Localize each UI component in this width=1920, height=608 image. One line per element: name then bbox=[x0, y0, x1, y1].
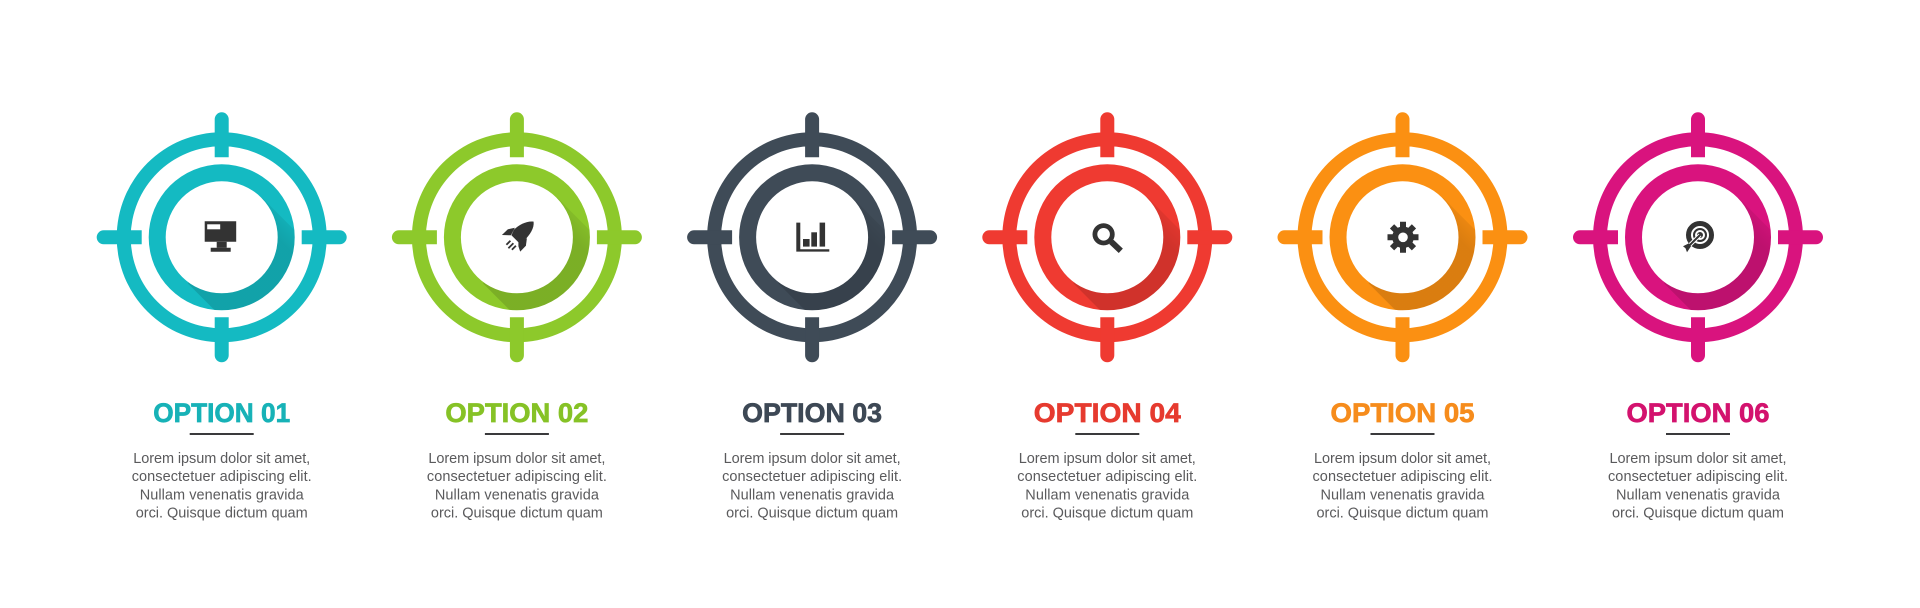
description 01: Lorem ipsum dolor sit amet, bbox=[133, 451, 310, 467]
option 01 bbox=[97, 112, 352, 522]
description 05: orci. Quisque dictum quam bbox=[1316, 506, 1488, 522]
description 04 bbox=[1017, 451, 1197, 522]
target graphic 05 bbox=[1278, 112, 1532, 367]
description 05: consectetuer adipiscing elit. bbox=[1312, 469, 1492, 485]
heading 03: OPTION 03 bbox=[742, 398, 882, 428]
target graphic 01 bbox=[97, 112, 352, 367]
option 06 bbox=[1573, 112, 1828, 522]
description 05: Nullam venenatis gravida bbox=[1320, 488, 1485, 504]
heading 02: OPTION 02 bbox=[445, 398, 588, 428]
heading 05: OPTION 05 bbox=[1330, 398, 1474, 428]
description 02: orci. Quisque dictum quam bbox=[431, 506, 603, 522]
description 04: Nullam venenatis gravida bbox=[1025, 488, 1190, 504]
option 04 bbox=[982, 112, 1237, 522]
description 01 bbox=[132, 451, 312, 522]
icon: gear bbox=[1381, 215, 1425, 259]
description 06 bbox=[1608, 451, 1788, 522]
description 01: consectetuer adipiscing elit. bbox=[132, 469, 312, 485]
description 03: consectetuer adipiscing elit. bbox=[722, 469, 902, 485]
icon: bar chart bbox=[796, 223, 829, 252]
option 05 bbox=[1278, 112, 1532, 522]
option 02 bbox=[392, 112, 647, 522]
icon: rocket bbox=[502, 221, 534, 252]
target graphic 04 bbox=[982, 112, 1237, 367]
description 06: orci. Quisque dictum quam bbox=[1612, 506, 1784, 522]
target graphic 02 bbox=[392, 112, 647, 367]
description 03: Lorem ipsum dolor sit amet, bbox=[724, 451, 901, 467]
description 05: Lorem ipsum dolor sit amet, bbox=[1314, 451, 1491, 467]
description 06: consectetuer adipiscing elit. bbox=[1608, 469, 1788, 485]
target graphic 06 bbox=[1573, 112, 1828, 367]
description 02 bbox=[427, 451, 607, 522]
description 02: Nullam venenatis gravida bbox=[435, 488, 600, 504]
description 01: Nullam venenatis gravida bbox=[140, 488, 305, 504]
description 03: Nullam venenatis gravida bbox=[730, 488, 895, 504]
description 03 bbox=[722, 451, 902, 522]
target graphic 03 bbox=[687, 112, 942, 367]
icon: magnifier bbox=[1095, 226, 1121, 251]
option 03 bbox=[687, 112, 942, 522]
description 02: consectetuer adipiscing elit. bbox=[427, 469, 607, 485]
description 04: orci. Quisque dictum quam bbox=[1021, 506, 1193, 522]
description 02: Lorem ipsum dolor sit amet, bbox=[428, 451, 605, 467]
description 06: Nullam venenatis gravida bbox=[1616, 488, 1781, 504]
description 06: Lorem ipsum dolor sit amet, bbox=[1610, 451, 1786, 467]
heading 06: OPTION 06 bbox=[1626, 398, 1770, 428]
heading 01: OPTION 01 bbox=[153, 398, 290, 428]
description 03: orci. Quisque dictum quam bbox=[726, 506, 898, 522]
description 04: Lorem ipsum dolor sit amet, bbox=[1019, 451, 1196, 467]
description 05 bbox=[1312, 451, 1492, 522]
icon: bullseye bbox=[1683, 224, 1712, 252]
icon: monitor bbox=[205, 221, 236, 252]
description 01: orci. Quisque dictum quam bbox=[136, 506, 308, 522]
heading 04: OPTION 04 bbox=[1034, 398, 1181, 428]
description 04: consectetuer adipiscing elit. bbox=[1017, 469, 1197, 485]
